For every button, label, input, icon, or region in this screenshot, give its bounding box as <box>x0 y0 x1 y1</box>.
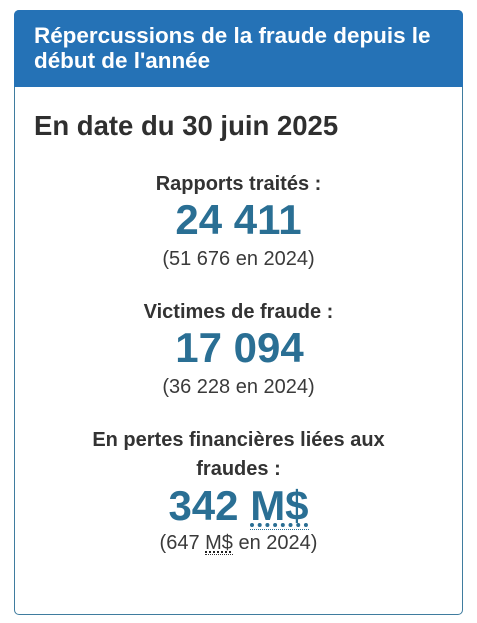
label: victims: Victimes de fraude : <box>144 301 333 323</box>
heading: card title: début de l'année <box>34 48 210 73</box>
number: losses: 342 M$ <box>168 482 309 529</box>
comparison: losses 2024: (647 M$ en 2024) <box>160 532 317 554</box>
label: losses <box>92 429 385 480</box>
number: victims: 17 094 <box>175 324 304 371</box>
heading: date: En date du 30 juin 2025 <box>34 110 338 141</box>
stat: financial losses <box>92 429 385 555</box>
heading: card title <box>34 23 431 73</box>
number: reports: 24 411 <box>175 196 302 243</box>
comparison: reports 2024: (51 676 en 2024) <box>162 248 315 270</box>
panel header <box>14 10 463 87</box>
stat: reports processed <box>156 173 321 270</box>
label: losses: fraudes : <box>196 458 281 480</box>
label: reports: Rapports traités : <box>156 173 321 195</box>
comparison: victims 2024: (36 228 en 2024) <box>162 376 315 398</box>
stat: fraud victims <box>144 301 333 398</box>
heading: card title: Répercussions de la fraude depuis le <box>34 23 431 48</box>
label: losses: En pertes financières liées aux <box>92 429 385 451</box>
